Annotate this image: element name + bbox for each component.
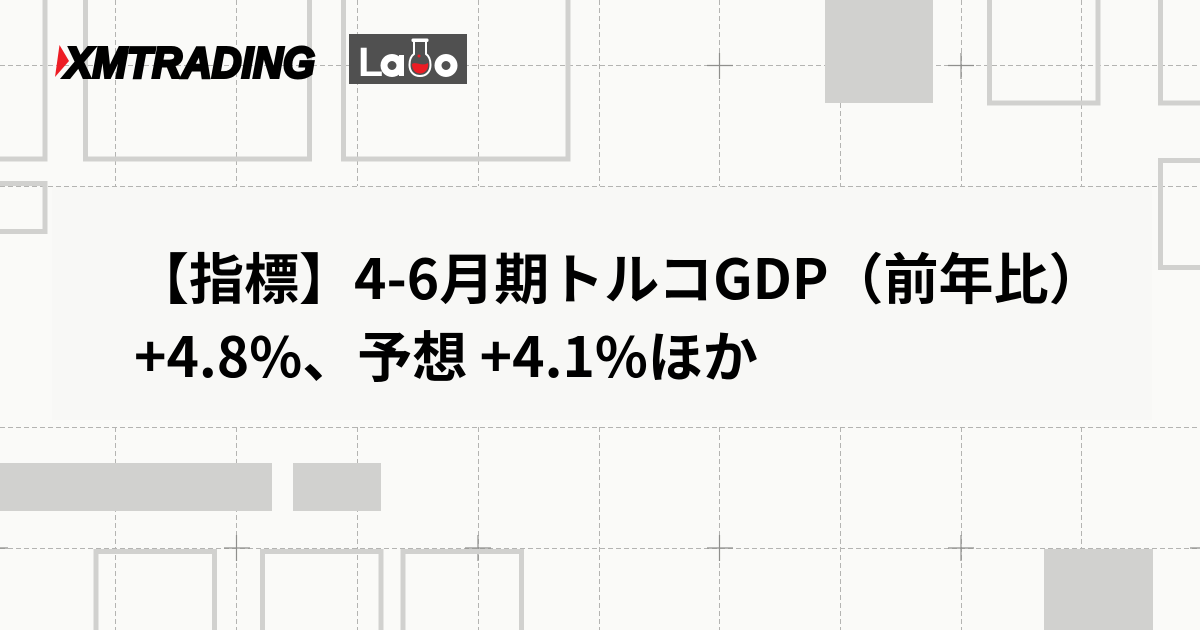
title	[134, 235, 1104, 393]
title: +4.8%、予想 +4.1%ほか	[134, 313, 758, 393]
top frames	[0, 0, 1200, 268]
logo: Lab	[349, 34, 467, 84]
title: 【指標】4-6月期トルコGDP（前年比）	[134, 235, 1104, 315]
bottom frames	[96, 552, 522, 630]
logo: Lab: L	[358, 39, 383, 84]
